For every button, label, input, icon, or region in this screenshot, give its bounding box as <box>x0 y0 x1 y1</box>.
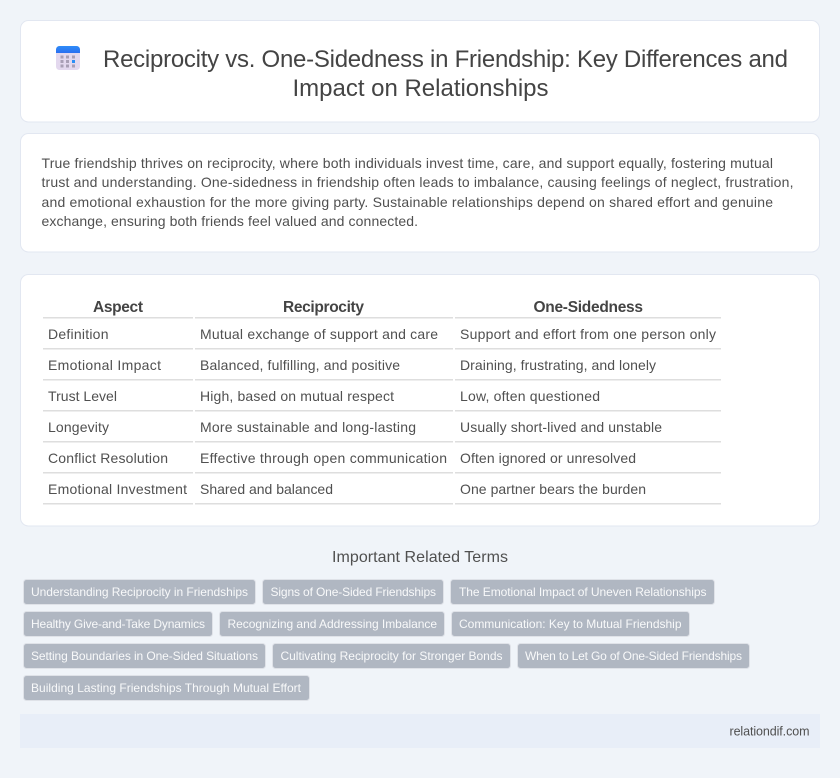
table row: definition <box>48 326 716 342</box>
tag <box>272 644 510 668</box>
table header: Reciprocity <box>283 299 364 316</box>
title: Impact on Relationships <box>292 75 548 102</box>
title <box>103 46 788 102</box>
tag <box>24 676 310 700</box>
title: Reciprocity vs. One-Sidedness in Friendship: Key Differences and <box>103 46 788 73</box>
table row: conflict resolution: Effective through open communication <box>200 450 447 466</box>
table header <box>93 299 643 316</box>
text block: introduction paragraph: True friendship thrives on reciprocity, where both individuals invest time, care, and support equally, fostering mutual <box>42 155 773 171</box>
table row: emotional investment <box>48 481 646 497</box>
panel: comparison table <box>20 274 820 526</box>
tag: Understanding Reciprocity in Friendships <box>31 585 248 599</box>
tag: Communication: Key to Mutual Friendship <box>459 617 682 631</box>
table row: trust level: Trust Level <box>48 388 117 404</box>
tag: Cultivating Reciprocity for Stronger Bonds <box>280 649 502 663</box>
tag <box>450 580 714 604</box>
table row: conflict resolution: Conflict Resolution <box>48 450 168 466</box>
tag <box>24 644 266 668</box>
table row: definition: Definition <box>48 326 108 342</box>
table row: emotional investment: One partner bears the burden <box>460 481 646 497</box>
table row: definition: Support and effort from one person only <box>460 326 716 342</box>
heading: related terms: Important Related Terms <box>332 549 508 566</box>
table row: definition: Mutual exchange of support and care <box>200 326 438 342</box>
table row: longevity: Longevity <box>48 419 109 435</box>
tag <box>518 644 750 668</box>
table grid lines <box>43 317 721 504</box>
icon: calendar <box>56 46 80 70</box>
tag: The Emotional Impact of Uneven Relationships <box>459 585 706 599</box>
tag group: related terms <box>24 580 750 700</box>
panel: introduction <box>20 134 820 252</box>
table row: longevity: Usually short-lived and unstable <box>460 419 662 435</box>
table row: emotional investment: Shared and balanced <box>200 481 333 497</box>
text block: introduction paragraph <box>42 155 794 229</box>
tag: Setting Boundaries in One-Sided Situations <box>31 649 258 663</box>
table row: emotional impact: Balanced, fulfilling, and positive <box>200 357 400 373</box>
table row: longevity: More sustainable and long-lasting <box>200 419 416 435</box>
tag: Healthy Give-and-Take Dynamics <box>31 617 205 631</box>
footer: relationdif.com <box>730 724 810 738</box>
table row: emotional impact: Emotional Impact <box>48 357 161 373</box>
table row: conflict resolution: Often ignored or unresolved <box>460 450 636 466</box>
text block: introduction paragraph: trust and understanding. One-sidedness in friendship often leads to imbalance, causing feelings of neglect, frustration, <box>42 174 794 190</box>
panel: header <box>20 20 820 122</box>
text block: introduction paragraph: exchange, ensuring both friends feel valued and connected. <box>42 213 418 229</box>
table row: conflict resolution <box>48 450 636 466</box>
tag <box>24 612 212 636</box>
table header: One-Sidedness <box>534 299 643 316</box>
tag <box>220 612 444 636</box>
tag: Recognizing and Addressing Imbalance <box>228 617 437 631</box>
tag <box>452 612 690 636</box>
tag: Signs of One-Sided Friendships <box>270 585 436 599</box>
table row: trust level <box>48 388 600 404</box>
tag <box>24 580 256 604</box>
table row: trust level: High, based on mutual respect <box>200 388 394 404</box>
footer <box>20 714 820 748</box>
tag: Building Lasting Friendships Through Mutual Effort <box>31 681 302 695</box>
table row: trust level: Low, often questioned <box>460 388 600 404</box>
table row: emotional impact <box>48 357 656 373</box>
table header: Aspect <box>93 299 143 316</box>
table row: longevity <box>48 419 662 435</box>
table row: emotional investment: Emotional Investment <box>48 481 187 497</box>
table row: emotional impact: Draining, frustrating, and lonely <box>460 357 656 373</box>
tag: When to Let Go of One-Sided Friendships <box>525 649 742 663</box>
tag <box>262 580 444 604</box>
text block: introduction paragraph: and emotional exhaustion for the more giving party. Sustainable relationships depend on shared effort and genuine <box>42 194 773 210</box>
